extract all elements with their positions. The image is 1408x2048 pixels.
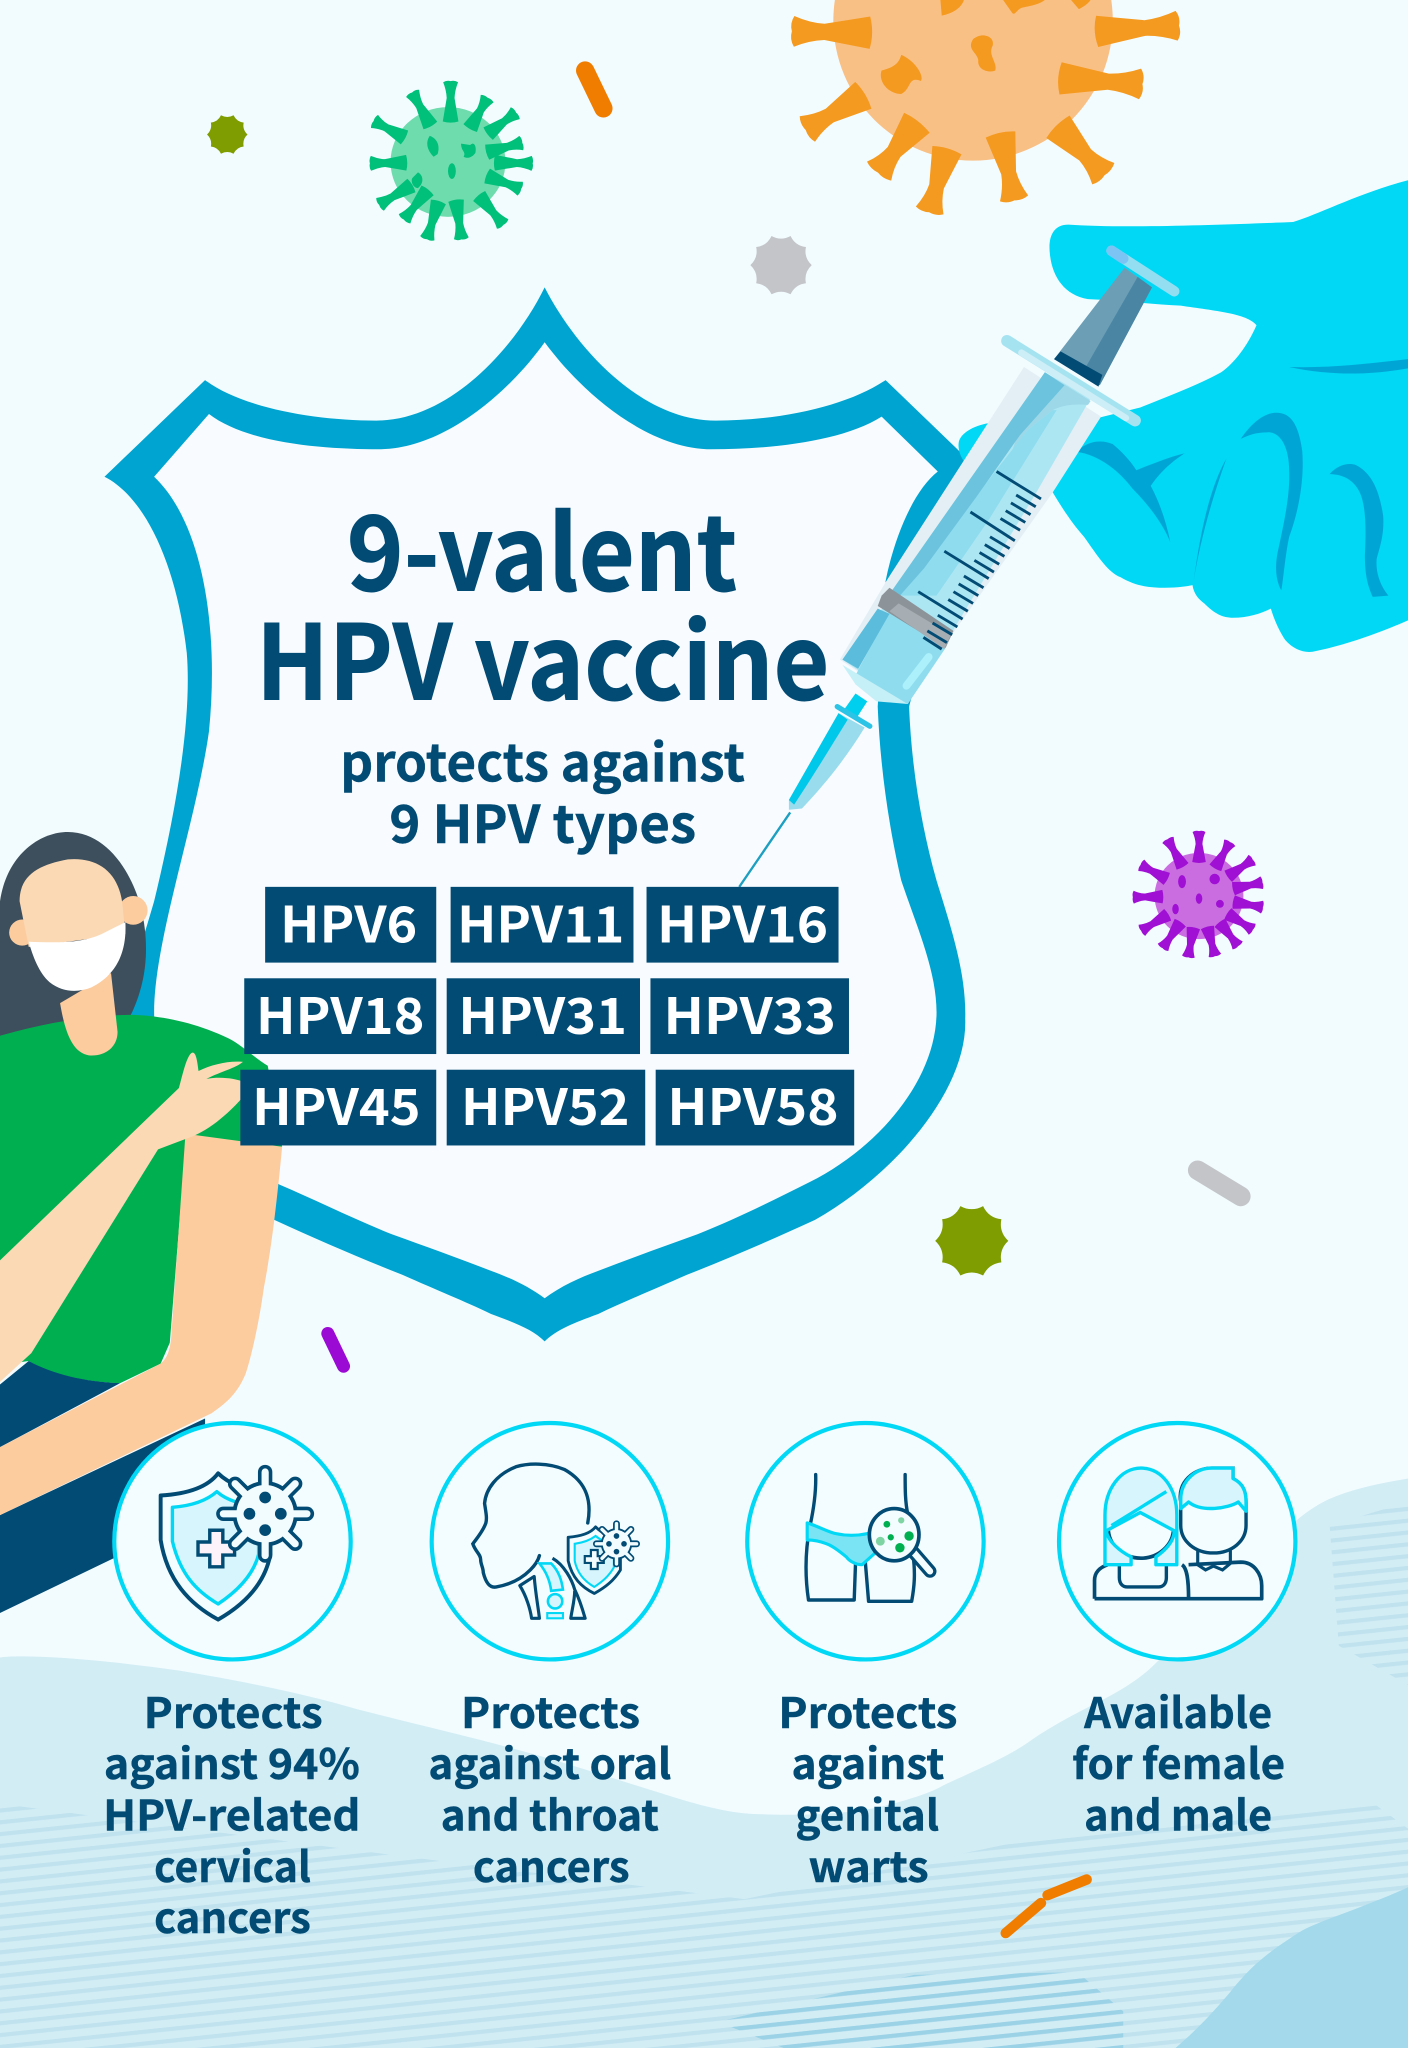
row two: HPV31 — [458, 977, 627, 1049]
title: HPV vaccine — [256, 579, 829, 729]
caption: female and male: and male — [1084, 1784, 1272, 1844]
graduation ticks — [918, 472, 1041, 649]
caption: genital warts: genital — [795, 1784, 939, 1844]
stopper — [878, 588, 953, 649]
caption: oral and throat cancers — [428, 1681, 671, 1895]
caption: genital warts — [778, 1681, 957, 1895]
row three: HPV52 — [461, 1068, 630, 1140]
type tags — [240, 885, 854, 1145]
title — [256, 470, 829, 729]
row three: HPV58 — [667, 1068, 839, 1140]
row one: HPV16 — [657, 885, 828, 957]
raised arm — [0, 1134, 282, 1515]
caption: oral and throat cancers: Protects — [461, 1681, 640, 1741]
caption: cervical cancers: against 94% — [104, 1732, 360, 1792]
face mask — [29, 922, 126, 991]
caption: cervical cancers: Protects — [144, 1681, 323, 1741]
caption: oral and throat cancers: and throat — [441, 1784, 659, 1844]
caption: genital warts: warts — [808, 1835, 929, 1895]
subtitle — [340, 722, 745, 859]
caption: cervical cancers — [103, 1681, 360, 1946]
subtitle: 9 HPV types — [389, 783, 696, 859]
row two — [244, 977, 849, 1054]
row two: HPV18 — [256, 977, 424, 1049]
neck — [60, 973, 118, 1055]
ears — [119, 896, 148, 925]
caption: female and male — [1072, 1681, 1285, 1844]
caption: oral and throat cancers: cancers — [473, 1835, 630, 1895]
face — [20, 859, 125, 947]
caption: genital warts: Protects — [778, 1681, 957, 1741]
caption: cervical cancers: HPV-related — [103, 1784, 360, 1844]
caption: female and male: Available — [1083, 1681, 1272, 1741]
trousers — [0, 1361, 205, 1613]
row three — [240, 1068, 854, 1145]
icon: head and throat — [432, 1423, 668, 1659]
icon: female and male — [1059, 1423, 1295, 1659]
hand and forearm — [0, 1053, 243, 1382]
icon: shield with virus — [114, 1423, 351, 1659]
caption: cervical cancers: cervical — [154, 1835, 311, 1895]
caption: oral and throat cancers: against oral — [428, 1732, 671, 1792]
big orange virus — [791, 0, 1181, 217]
person — [0, 832, 282, 1613]
row one: HPV6 — [280, 885, 417, 957]
shield — [104, 287, 973, 1341]
row two: HPV33 — [664, 977, 836, 1049]
subtitle: protects against — [340, 722, 745, 798]
caption: genital warts: against — [792, 1732, 944, 1792]
pills — [328, 71, 1241, 1933]
row three: HPV45 — [252, 1068, 421, 1140]
nose cone — [842, 665, 908, 704]
title: 9-valent — [347, 470, 737, 620]
caption: female and male: for female — [1072, 1732, 1285, 1792]
row one — [265, 885, 839, 963]
shirt — [0, 1015, 282, 1383]
small virus particles — [207, 115, 1008, 1276]
barrel — [840, 367, 1101, 704]
needle and hub — [739, 694, 870, 887]
hair — [0, 832, 146, 1045]
row one: HPV11 — [457, 885, 624, 957]
plunger — [1054, 251, 1174, 387]
caption: cervical cancers: cancers — [154, 1886, 311, 1946]
purple virus — [1132, 831, 1264, 959]
gloved hand — [959, 180, 1408, 652]
icon: genital warts magnifier — [747, 1423, 984, 1659]
syringe — [739, 251, 1174, 887]
flange — [1007, 341, 1135, 421]
green virus — [369, 81, 533, 242]
background waves — [0, 1479, 1408, 2048]
